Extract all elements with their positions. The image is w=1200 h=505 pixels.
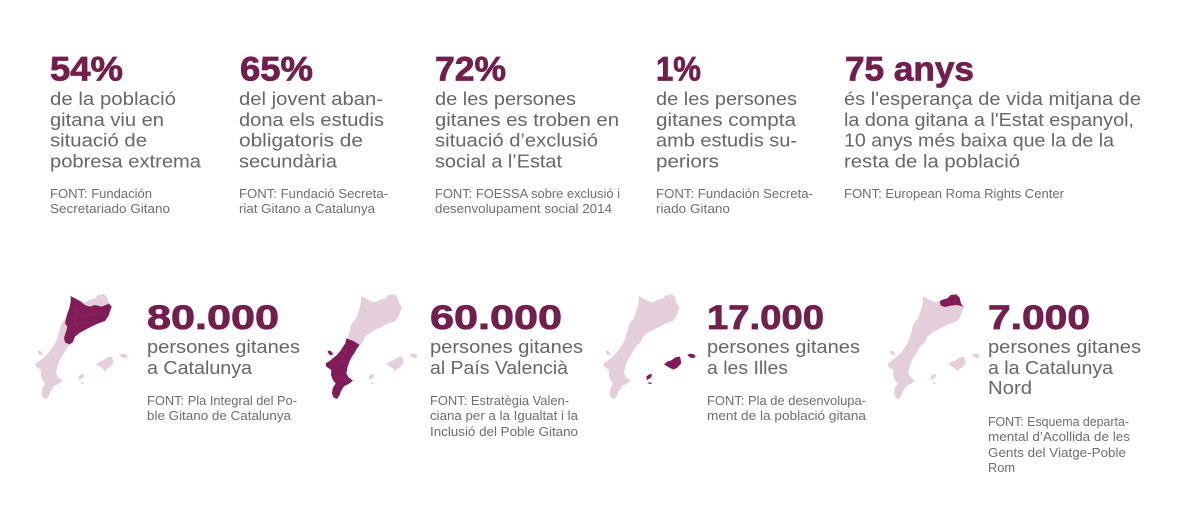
- stat: 72% social exclusion: [435, 50, 620, 216]
- stat: 17.000 Illes: [707, 299, 866, 423]
- stat: 54% poverty: situació de: [50, 130, 147, 150]
- stat: 54% poverty: Secretariado Gitano: [50, 202, 170, 216]
- stat: 72% social exclusion: gitanes es troben en: [435, 109, 619, 130]
- stat: 60.000 País Valencià: Inclusió del Poble Gitano: [430, 425, 578, 439]
- stat: 1% higher education: 1%: [656, 50, 701, 88]
- stat: 7.000 Catalunya Nord: Gents del Viatge-Poble: [988, 446, 1126, 460]
- map: Catalunya Nord highlighted: [888, 294, 980, 399]
- stat: 54% poverty: [50, 50, 202, 216]
- stat: 65% school dropout: del jovent aban-: [239, 88, 383, 109]
- stat: 1% higher education: riado Gitano: [656, 202, 730, 216]
- stat: 80.000 Catalunya: FONT: Pla Integral del Po-: [147, 394, 297, 408]
- stat: 1% higher education: FONT: Fundación Secreta-: [656, 187, 813, 201]
- stat: 7.000 Catalunya Nord: Nord: [988, 377, 1032, 398]
- stat: 60.000 País Valencià: ciana per a la Igualtat i la: [430, 409, 578, 423]
- stat: 7.000 Catalunya Nord: persones gitanes: [988, 336, 1141, 357]
- stat: 7.000 Catalunya Nord: FONT: Esquema departa-: [988, 415, 1129, 429]
- stat: 7.000 Catalunya Nord: [988, 299, 1141, 475]
- stat: 75 anys life expectancy: 75 anys: [845, 50, 974, 88]
- stat: 80.000 Catalunya: ble Gitano de Catalunya: [147, 409, 291, 423]
- stat: 65% school dropout: secundària: [239, 150, 338, 172]
- stat: 1% higher education: gitanes compta: [656, 109, 797, 130]
- stat: 60.000 País Valencià: al País Valencià: [430, 357, 569, 378]
- stat: 75 anys life expectancy: FONT: European Roma Rights Center: [844, 187, 1064, 201]
- stat: 17.000 Illes: persones gitanes: [707, 336, 860, 357]
- stat: 80.000 Catalunya: 80.000: [147, 299, 279, 337]
- stat: 80.000 Catalunya: persones gitanes: [147, 336, 300, 357]
- map: País Valencià highlighted: [326, 294, 418, 399]
- stat: 80.000 Catalunya: a Catalunya: [147, 357, 253, 378]
- stat: 75 anys life expectancy: resta de la població: [844, 150, 1020, 172]
- stat: 65% school dropout: [239, 50, 388, 216]
- stat: 7.000 Catalunya Nord: a la Catalunya: [988, 357, 1114, 378]
- stat: 75 anys life expectancy: és l'esperança de vida mitjana de: [844, 88, 1141, 109]
- stat: 7.000 Catalunya Nord: Rom: [988, 461, 1015, 475]
- stat: 7.000 Catalunya Nord: mental d’Acollida de les: [988, 430, 1130, 444]
- stat: 54% poverty: de la població: [50, 88, 176, 109]
- stat: 65% school dropout: dona els estudis: [239, 109, 384, 130]
- map: Catalunya highlighted: [35, 294, 128, 399]
- stat: 75 anys life expectancy: la dona gitana a l'Estat espanyol,: [844, 109, 1134, 130]
- stat: 72% social exclusion: desenvolupament social 2014: [435, 202, 612, 216]
- stat: 72% social exclusion: social a l’Estat: [435, 150, 562, 172]
- stat: 54% poverty: 54%: [50, 50, 123, 88]
- stat: 65% school dropout: 65%: [240, 50, 313, 88]
- stat: 1% higher education: amb estudis su-: [656, 130, 797, 150]
- map: Illes highlighted: [603, 294, 696, 399]
- stat: 1% higher education: de les persones: [656, 88, 797, 109]
- stat: 17.000 Illes: FONT: Pla de desenvolupa-: [707, 394, 866, 408]
- stat: 54% poverty: gitana viu en: [50, 109, 164, 130]
- stat: 65% school dropout: riat Gitano a Catalunya: [239, 202, 375, 216]
- stat: 17.000 Illes: ment de la població gitana: [707, 409, 866, 423]
- stat: 7.000 Catalunya Nord: 7.000: [988, 299, 1090, 337]
- stat: 1% higher education: [656, 50, 813, 216]
- stat: 1% higher education: periors: [656, 150, 719, 172]
- stat: 75 anys life expectancy: 10 anys més baixa que la de la: [844, 130, 1115, 150]
- stat: 60.000 País Valencià: [430, 299, 583, 439]
- stat: 60.000 País Valencià: 60.000: [430, 299, 562, 337]
- stat: 17.000 Illes: a les Illes: [707, 357, 788, 378]
- stat: 17.000 Illes: 17.000: [707, 299, 824, 337]
- stat: 60.000 País Valencià: persones gitanes: [430, 336, 583, 357]
- stat: 65% school dropout: obligatoris de: [239, 130, 363, 150]
- stat: 72% social exclusion: situació d’exclusió: [435, 130, 598, 150]
- stat: 60.000 País Valencià: FONT: Estratègia Valen-: [430, 394, 569, 408]
- stat: 65% school dropout: FONT: Fundació Secreta-: [239, 187, 388, 201]
- stat: 80.000 Catalunya: [147, 299, 300, 423]
- stat: 72% social exclusion: FONT: FOESSA sobre exclusió i: [435, 187, 620, 201]
- stat: 75 anys life expectancy: [844, 50, 1141, 201]
- stat: 54% poverty: pobresa extrema: [50, 150, 202, 172]
- stat: 54% poverty: FONT: Fundación: [50, 187, 152, 201]
- stat: 72% social exclusion: de les persones: [435, 88, 576, 109]
- stat: 72% social exclusion: 72%: [435, 50, 506, 88]
